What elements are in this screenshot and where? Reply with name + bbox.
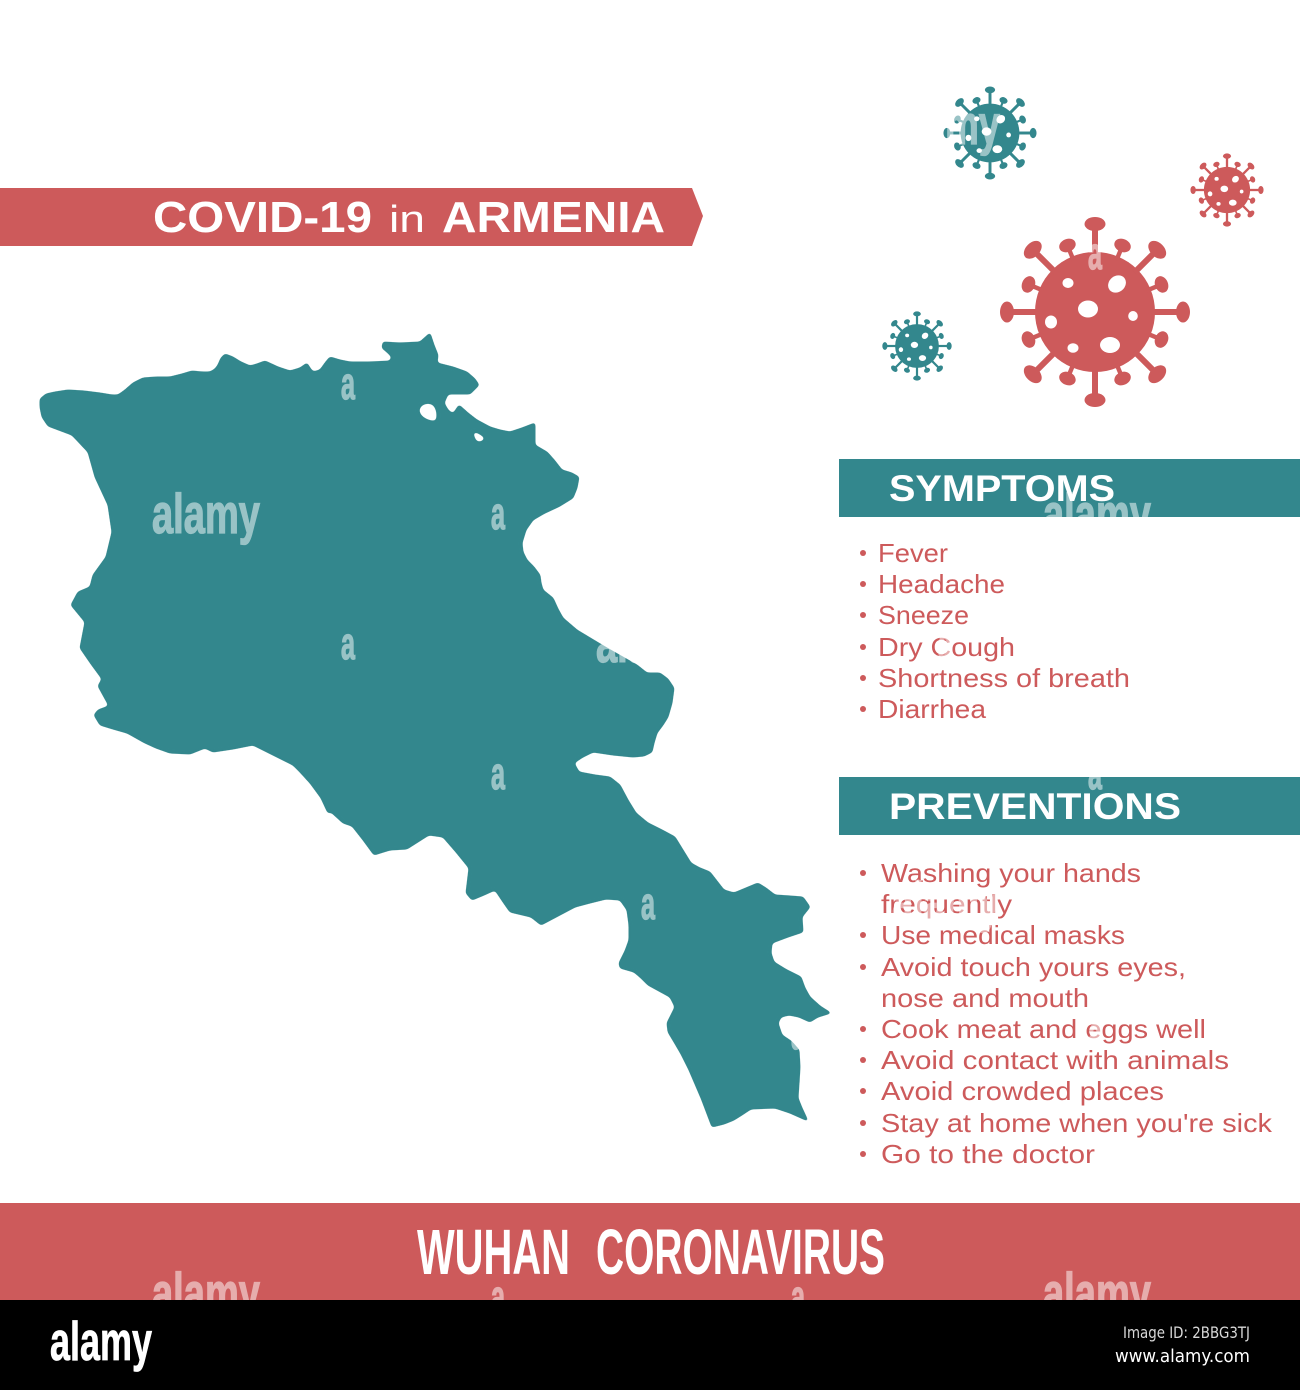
- symptoms list: [860, 538, 1130, 724]
- website: www.alamy.com: [1115, 1346, 1250, 1367]
- map of Armenia: [40, 333, 831, 1127]
- symptoms list: Diarrhea: [878, 694, 987, 724]
- watermark: a: [491, 748, 506, 799]
- virus icon: small teal: [882, 311, 952, 381]
- watermark: alamy: [1043, 1261, 1151, 1324]
- watermark: a: [491, 488, 506, 539]
- symptoms list: Headache: [878, 569, 1005, 599]
- watermark: alamy: [892, 870, 1000, 933]
- watermark: a: [938, 618, 953, 669]
- title banner: [0, 188, 703, 246]
- virus icon: teal top: [943, 86, 1037, 180]
- preventions heading: PREVENTIONS: [889, 786, 1181, 827]
- watermark: [152, 93, 1151, 1324]
- title banner: ARMENIA: [442, 193, 665, 242]
- watermark: a: [491, 1271, 506, 1322]
- alamy logo: alamy: [50, 1310, 152, 1372]
- watermark: alamy: [152, 482, 260, 545]
- preventions list: Cook meat and eggs well: [881, 1014, 1206, 1044]
- symptoms list: Shortness of breath: [878, 663, 1130, 693]
- bottom credit bar: [0, 1300, 1300, 1390]
- preventions list: Use medical masks: [881, 920, 1125, 950]
- preventions list: [860, 858, 1273, 1169]
- footer banner: CORONAVIRUS: [596, 1216, 885, 1288]
- symptoms list: Sneeze: [878, 600, 969, 630]
- preventions list: Go to the doctor: [881, 1139, 1095, 1169]
- virus icon: small red: [1190, 153, 1264, 227]
- watermark: alamy: [596, 611, 704, 674]
- watermark: a: [1088, 1008, 1103, 1059]
- watermark: alamy: [1043, 482, 1151, 545]
- symptoms list: Fever: [878, 538, 948, 568]
- symptoms heading: [839, 459, 1300, 517]
- preventions heading: [839, 777, 1300, 835]
- watermark: a: [791, 1271, 806, 1322]
- symptoms heading: SYMPTOMS: [889, 468, 1115, 509]
- watermark: a: [791, 1008, 806, 1059]
- watermark: a: [1088, 748, 1103, 799]
- footer banner: [0, 1203, 1300, 1300]
- watermark: a: [641, 878, 656, 929]
- virus icon: large red: [1000, 217, 1190, 407]
- title banner: in: [389, 199, 425, 241]
- preventions list: Washing your hands: [881, 858, 1141, 888]
- watermark: alamy: [152, 1261, 260, 1324]
- title banner: COVID-19: [153, 193, 372, 242]
- watermark: alamy: [892, 93, 1000, 156]
- image id: Image ID: 2BBG3TJ: [1123, 1323, 1250, 1342]
- watermark: a: [1088, 228, 1103, 279]
- preventions list: Stay at home when you're sick: [881, 1108, 1273, 1138]
- watermark: a: [341, 618, 356, 669]
- symptoms list: Dry Cough: [878, 632, 1015, 662]
- preventions list: frequently: [881, 889, 1012, 919]
- watermark: a: [341, 358, 356, 409]
- preventions list: Avoid contact with animals: [881, 1045, 1229, 1075]
- preventions list: nose and mouth: [881, 983, 1089, 1013]
- footer banner: WUHAN: [417, 1216, 570, 1288]
- preventions list: Avoid touch yours eyes,: [881, 952, 1186, 982]
- preventions list: Avoid crowded places: [881, 1076, 1164, 1106]
